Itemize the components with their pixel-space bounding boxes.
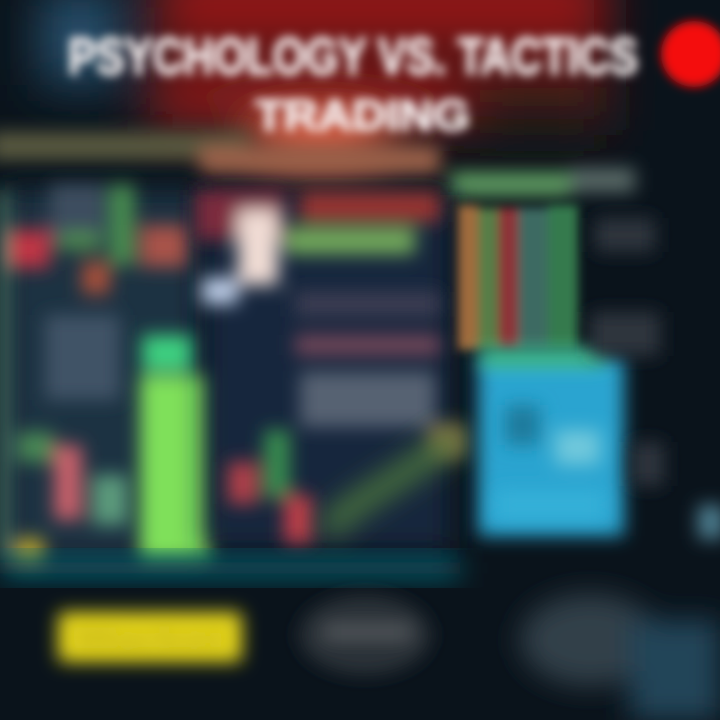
banner strip bbox=[0, 132, 635, 196]
bottom center emblem bbox=[299, 595, 431, 675]
bottom right emblem bbox=[520, 594, 720, 720]
panel: green bar bbox=[140, 335, 212, 560]
title: TRADING bbox=[255, 91, 470, 140]
icon: red record dot bbox=[661, 21, 720, 87]
panel: center chart bbox=[195, 190, 465, 550]
bottom teal band bbox=[0, 558, 460, 578]
header background glow bbox=[40, 0, 610, 167]
title bbox=[68, 28, 638, 140]
button: yellow: Market bbox=[75, 622, 225, 655]
panel: left chart bbox=[0, 185, 200, 564]
right side labels bbox=[590, 218, 720, 539]
panel: blue info card bbox=[478, 350, 624, 536]
button: yellow bbox=[58, 612, 242, 662]
chart trend line bbox=[325, 435, 460, 530]
panel: striped column chart bbox=[458, 205, 578, 350]
